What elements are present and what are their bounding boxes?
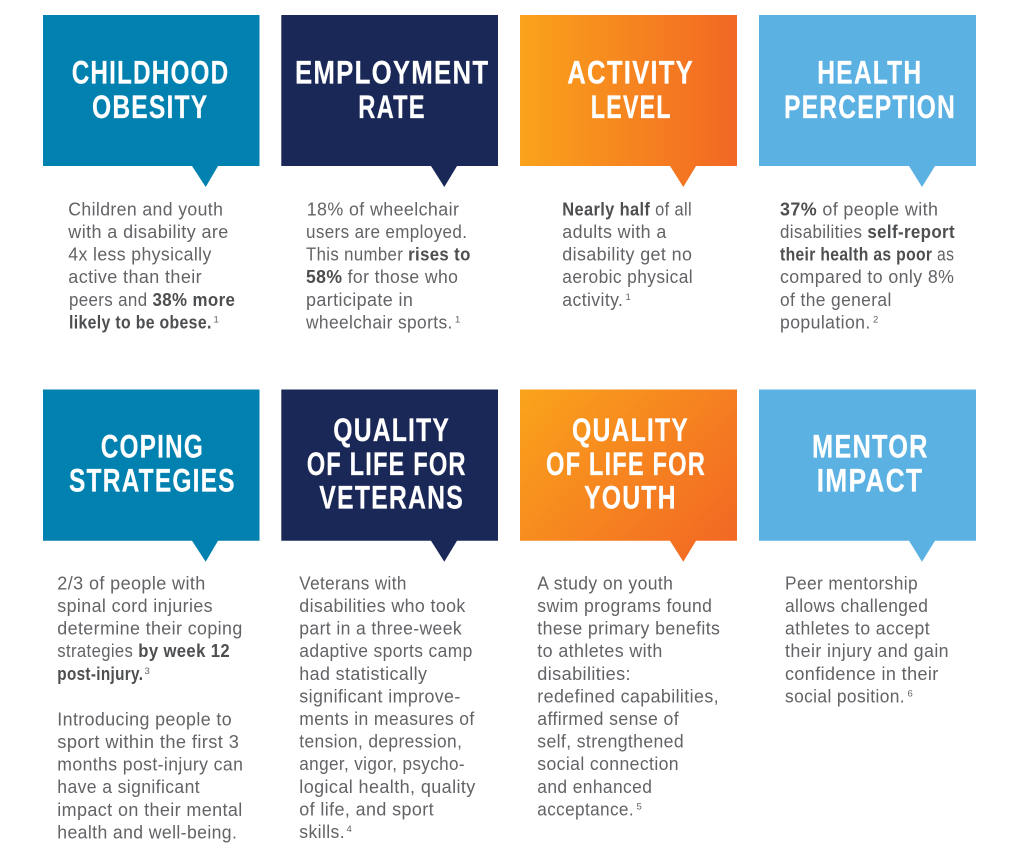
heading: coping strategies	[69, 429, 236, 499]
text: activity level: disability get no	[562, 245, 692, 265]
heading: mentor impact: MENTOR	[812, 429, 929, 465]
heading: activity level: LEVEL	[591, 89, 672, 125]
text: quality of life for veterans: part in a three-week	[299, 619, 463, 639]
text: activity level: adults with a	[562, 222, 667, 242]
heading: employment rate: EMPLOYMENT	[295, 54, 489, 90]
text: quality of life for youth: 5	[636, 801, 642, 812]
heading: quality of life for veterans: OF LIFE FOR	[307, 446, 467, 482]
text: employment rate	[305, 199, 471, 332]
text: quality of life for youth: redefined capabilities,	[537, 686, 719, 706]
text: mentor impact: confidence in their	[785, 664, 939, 684]
text: quality of life for youth: swim programs found	[537, 596, 712, 616]
panel: quality of life for veterans	[281, 390, 498, 842]
panel: activity level	[520, 15, 737, 310]
text: health perception: 37% of people with	[780, 199, 938, 219]
heading: mentor impact: IMPACT	[817, 463, 923, 499]
text: quality of life for veterans: had statistically	[299, 664, 427, 684]
text: coping strategies: 2/3 of people with	[57, 573, 206, 593]
callout box: activity level	[520, 15, 737, 187]
text: mentor impact: allows challenged	[785, 596, 928, 616]
heading: quality of life for youth: YOUTH	[584, 480, 677, 516]
text: quality of life for youth: acceptance.	[537, 799, 634, 819]
heading: health perception	[784, 54, 956, 125]
text: quality of life for veterans: Veterans with	[299, 573, 407, 593]
text: activity level: 1	[626, 292, 631, 303]
heading: quality of life for veterans: VETERANS	[319, 480, 464, 516]
text: coping strategies: 3	[144, 666, 150, 677]
text: employment rate: wheelchair sports.	[305, 312, 453, 332]
text: employment rate: users are employed.	[306, 222, 467, 242]
text: quality of life for youth: A study on youth	[537, 573, 673, 593]
heading: health perception: HEALTH	[817, 54, 922, 90]
callout box: mentor impact	[759, 390, 976, 562]
text: health perception: their health as poor as	[780, 245, 954, 265]
heading: quality of life for youth: OF LIFE FOR	[546, 446, 706, 482]
text: health perception: population.	[780, 312, 871, 332]
callout box: coping strategies	[43, 390, 260, 562]
text: mentor impact: social position.	[785, 686, 905, 706]
heading: childhood obesity: CHILDHOOD	[72, 54, 229, 90]
callout box: quality of life for veterans	[281, 390, 498, 562]
text: quality of life for veterans	[299, 573, 476, 842]
text: activity level: Nearly half of all	[562, 199, 692, 219]
heading: mentor impact	[812, 429, 929, 499]
text: activity level: activity.	[562, 290, 623, 310]
panel: mentor impact	[759, 390, 976, 706]
text: employment rate: This number rises to	[306, 245, 471, 265]
heading: coping strategies: COPING	[101, 429, 204, 465]
text: quality of life for veterans: adaptive sports camp	[299, 641, 473, 661]
text: health perception: disabilities self-report	[780, 222, 955, 242]
text: activity level	[562, 199, 693, 310]
text: health perception	[780, 199, 955, 332]
text: coping strategies: strategies by week 12	[57, 641, 230, 661]
text: quality of life for veterans: disabilities who took	[299, 596, 466, 616]
text: childhood obesity: likely to be obese.	[69, 312, 212, 332]
text: employment rate: 1	[455, 314, 460, 325]
heading: childhood obesity	[72, 54, 229, 125]
callout box: employment rate	[281, 15, 498, 187]
text: mentor impact: 6	[908, 688, 913, 699]
text: mentor impact: athletes to accept	[785, 619, 930, 639]
text: mentor impact: Peer mentorship	[785, 573, 918, 593]
text: coping strategies: Introducing people to	[57, 709, 232, 729]
text: quality of life for veterans: 4	[346, 824, 352, 835]
text: quality of life for youth: to athletes with	[537, 641, 663, 661]
text: employment rate: 18% of wheelchair	[307, 199, 459, 219]
panel: coping strategies	[43, 390, 260, 842]
text: coping strategies	[57, 573, 243, 842]
text: quality of life for youth: social connection	[537, 754, 679, 774]
text: quality of life for veterans: of life, and sport	[299, 799, 434, 819]
heading: quality of life for veterans: QUALITY	[333, 412, 450, 448]
heading: childhood obesity: OBESITY	[92, 89, 208, 125]
text: childhood obesity: 4x less physically	[68, 245, 212, 265]
panel: employment rate	[281, 15, 498, 332]
heading: health perception: PERCEPTION	[784, 89, 956, 125]
text: mentor impact	[785, 573, 949, 706]
text: mentor impact: their injury and gain	[785, 641, 949, 661]
text: coping strategies: post-injury.	[57, 664, 143, 684]
text: quality of life for youth: self, strengthened	[537, 732, 684, 752]
panel: health perception	[759, 15, 976, 332]
text: quality of life for youth	[537, 573, 720, 819]
text: coping strategies: health and well-being.	[57, 822, 237, 842]
text: coping strategies: spinal cord injuries	[57, 596, 213, 616]
text: quality of life for veterans: logical health, quality	[299, 777, 476, 797]
heading: quality of life for veterans	[307, 412, 467, 516]
text: activity level: aerobic physical	[562, 267, 693, 287]
callout box: health perception	[759, 15, 976, 187]
heading: activity level: ACTIVITY	[567, 54, 694, 90]
text: childhood obesity: Children and youth	[68, 199, 223, 219]
panel: childhood obesity	[43, 15, 260, 332]
text: quality of life for youth: disabilities:	[537, 664, 631, 684]
text: employment rate: participate in	[306, 290, 413, 310]
text: quality of life for youth: and enhanced	[537, 777, 652, 797]
text: quality of life for veterans: significant improve-	[299, 686, 461, 706]
heading: quality of life for youth	[546, 412, 706, 516]
text: coping strategies: sport within the first 3	[57, 732, 239, 752]
text: quality of life for veterans: anger, vigor, psycho-	[299, 754, 465, 774]
text: health perception: of the general	[780, 290, 892, 310]
text: quality of life for veterans: ments in measures of	[299, 709, 475, 729]
text: coping strategies: months post-injury can	[57, 755, 243, 775]
text: childhood obesity: 1	[214, 314, 219, 325]
text: health perception: 2	[873, 314, 878, 325]
text: employment rate: 58% for those who	[306, 267, 458, 287]
text: coping strategies: determine their coping	[57, 619, 243, 639]
heading: employment rate: RATE	[358, 89, 426, 125]
text: quality of life for veterans: tension, depression,	[299, 732, 462, 752]
text: childhood obesity	[67, 199, 235, 332]
text: childhood obesity: peers and 38% more	[69, 290, 235, 310]
callout box: quality of life for youth	[520, 390, 737, 562]
heading: employment rate	[295, 54, 489, 125]
text: quality of life for veterans: skills.	[299, 822, 345, 842]
heading: quality of life for youth: QUALITY	[572, 412, 689, 448]
heading: activity level	[567, 54, 694, 125]
text: childhood obesity: with a disability are	[67, 222, 229, 242]
text: childhood obesity: active than their	[68, 267, 202, 287]
text: quality of life for youth: these primary benefits	[537, 619, 720, 639]
panel: quality of life for youth	[520, 390, 737, 819]
text: coping strategies: have a significant	[57, 777, 200, 797]
text: coping strategies: impact on their mental	[57, 800, 243, 820]
heading: coping strategies: STRATEGIES	[69, 463, 236, 499]
text: quality of life for youth: affirmed sense of	[537, 709, 680, 729]
text: health perception: compared to only 8%	[780, 267, 954, 287]
callout box: childhood obesity	[43, 15, 260, 187]
